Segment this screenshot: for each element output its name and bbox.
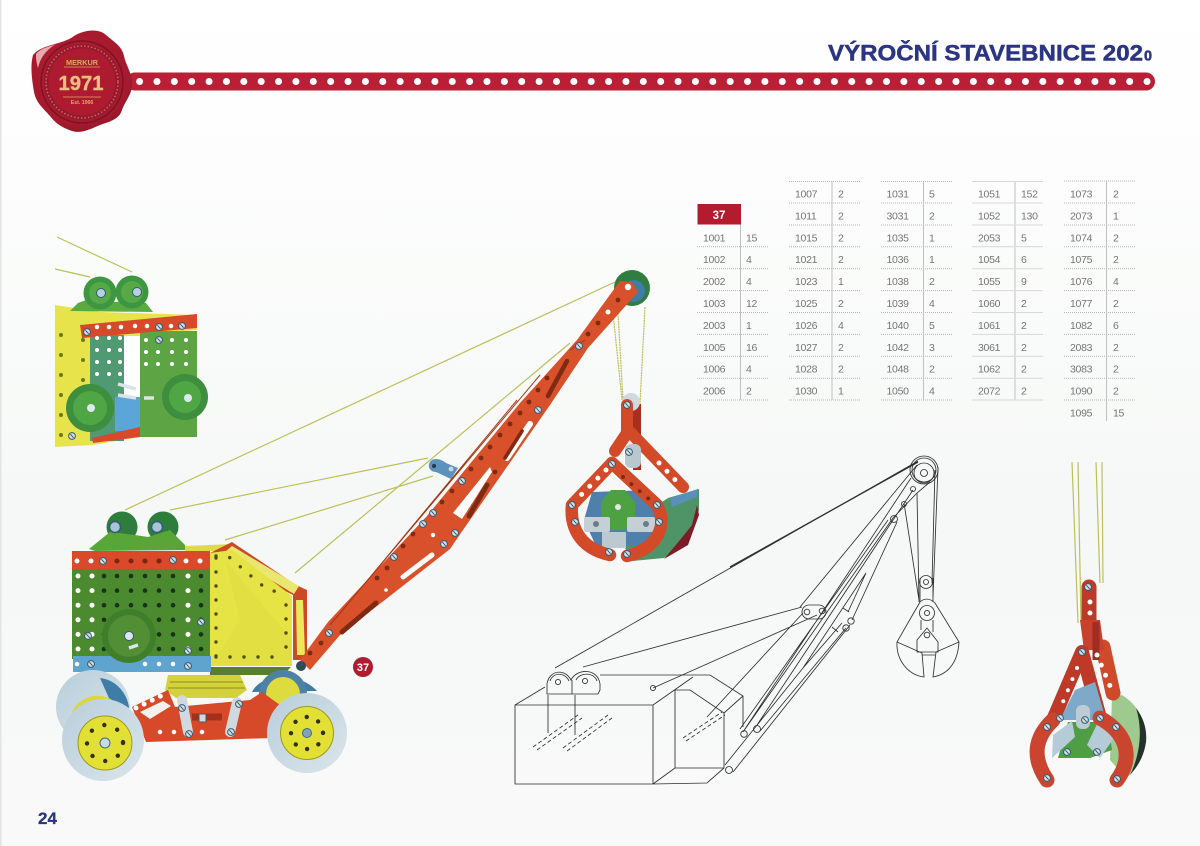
table column 5: 4: [1113, 276, 1119, 288]
diagram pulleys: [547, 671, 656, 694]
wax seal 1971: MERKUR: [66, 58, 99, 67]
table column 5: 2: [1113, 342, 1119, 354]
table column 4: 2: [1021, 364, 1027, 376]
table column 2: 1: [838, 386, 844, 398]
table column 3: 1039: [886, 298, 909, 310]
closed grab strings: [1072, 462, 1103, 623]
table column 1 with red header 37: [697, 204, 769, 400]
grab bucket inner plates: [584, 490, 655, 548]
wax seal 1971: [31, 31, 132, 132]
table column 1 with red header 37: 12: [746, 298, 758, 310]
table column 3: 5: [929, 188, 935, 200]
table column 2: 1028: [795, 364, 818, 376]
cabin front: green panel with strips: [72, 551, 211, 672]
page number: 24: [38, 809, 57, 828]
table column 1 with red header 37: 16: [746, 342, 758, 354]
table column 1 with red header 37: 4: [746, 364, 752, 376]
chassis: [132, 690, 280, 742]
table column 2: 1011: [795, 210, 817, 222]
table column 3: 4: [929, 298, 935, 310]
grab bucket arms: [568, 393, 683, 558]
table column 5: 6: [1113, 320, 1119, 332]
table column 2: 2: [838, 188, 844, 200]
table column 5: 1075: [1070, 254, 1093, 266]
table column 4: 2: [1021, 298, 1027, 310]
table column 2: 1021: [795, 254, 818, 266]
table column 1 with red header 37: 4: [746, 276, 752, 288]
table column 3: 2: [929, 276, 935, 288]
table column 1 with red header 37: 2006: [703, 386, 726, 398]
table column 4: 152: [1021, 188, 1038, 200]
table column 5: 1077: [1070, 298, 1093, 310]
table column 3: 2: [929, 210, 935, 222]
table column 1 with red header 37: 1006: [703, 364, 726, 376]
table column 2: 1025: [795, 298, 818, 310]
diagram cables: [555, 461, 938, 717]
table column 1 with red header 37: 15: [746, 232, 758, 244]
table column 3: 1: [929, 232, 935, 244]
table column 4: 1051: [978, 188, 1001, 200]
table column 5: 1076: [1070, 276, 1093, 288]
table column 1 with red header 37: 2002: [703, 276, 726, 288]
table column 4: 5: [1021, 232, 1027, 244]
table column 3: 1040: [886, 320, 909, 332]
table column 3: 3: [929, 342, 935, 354]
boom top pulley: [614, 270, 650, 306]
table column 3: 1038: [886, 276, 909, 288]
table column 2: 1026: [795, 320, 818, 332]
table column 2: 2: [838, 232, 844, 244]
table column 1 with red header 37: 1001: [703, 232, 726, 244]
boom mount plate: [429, 459, 458, 479]
illustration: boom: [296, 270, 650, 671]
table column 5: 2083: [1070, 342, 1093, 354]
table column 4: [972, 182, 1043, 400]
title: 0: [1144, 49, 1152, 65]
table column 3: 3031: [886, 210, 909, 222]
table column 3: 2: [929, 364, 935, 376]
badge: model number 37: [353, 657, 373, 677]
illustration: rear detail of crane cabin: [55, 237, 208, 447]
table column 2: 2: [838, 298, 844, 310]
table column 5: 1095: [1070, 408, 1093, 420]
table column 5: 2: [1113, 298, 1119, 310]
table column 4: 3061: [978, 342, 1001, 354]
table column 4: 2053: [978, 232, 1001, 244]
illustration: crane strings: [125, 282, 645, 573]
front wheels: [62, 693, 347, 781]
table column 2: 1015: [795, 232, 818, 244]
diagram grab bucket: [897, 576, 959, 677]
table column 4: 1054: [978, 254, 1001, 266]
illustration: crane main body: [56, 512, 347, 781]
table column 4: 1060: [978, 298, 1001, 310]
table column 2: 1023: [795, 276, 818, 288]
table column 2: 1027: [795, 342, 818, 354]
table column 4: 1061: [978, 320, 1001, 332]
table column 4: 2: [1021, 386, 1027, 398]
table column 3: 1050: [886, 386, 909, 398]
grab bucket shell: [584, 489, 699, 561]
table column 3: [881, 182, 952, 400]
table column 4: 6: [1021, 254, 1027, 266]
table column 4: 1055: [978, 276, 1001, 288]
table column 5: 1073: [1070, 188, 1093, 200]
table column 4: 130: [1021, 210, 1038, 222]
diagram cabin box: [515, 675, 743, 784]
illustration: grab bucket closed: [1037, 462, 1146, 783]
table column 2: 2: [838, 210, 844, 222]
table column 5: 1090: [1070, 386, 1093, 398]
table column 5: 2: [1113, 364, 1119, 376]
table column 5: 2: [1113, 254, 1119, 266]
table column 1 with red header 37: 1002: [703, 254, 726, 266]
table column 2: 2: [838, 364, 844, 376]
table column 2: [789, 182, 860, 400]
parts table: [697, 181, 1135, 421]
table column 1 with red header 37: 2: [746, 386, 752, 398]
table column 1 with red header 37: 37: [713, 210, 725, 222]
table column 3: 5: [929, 320, 935, 332]
boom lattice: [296, 281, 638, 671]
table column 4: 1052: [978, 210, 1001, 222]
table column 2: 1007: [795, 188, 818, 200]
rear wheels: [56, 670, 317, 744]
table column 2: 2: [838, 342, 844, 354]
table column 5: 1082: [1070, 320, 1093, 332]
title: VÝROČNÍ STAVEBNICE 202: [828, 41, 1143, 66]
wax seal 1971: 1971: [58, 73, 104, 95]
closed grab drum and arms: [1037, 583, 1146, 783]
table column 3: 1031: [886, 188, 909, 200]
cabin side: yellow panel: [210, 542, 307, 675]
line drawing: technical crane diagram: [515, 456, 959, 784]
table column 4: 2: [1021, 342, 1027, 354]
table column 2: 4: [838, 320, 844, 332]
table column 1 with red header 37: 1003: [703, 298, 726, 310]
table column 3: 1: [929, 254, 935, 266]
table column 4: 1062: [978, 364, 1001, 376]
table column 5: 15: [1113, 408, 1125, 420]
wax seal 1971: Est. 1966: [71, 100, 93, 106]
turntable: [165, 675, 247, 698]
table column 5: [1064, 181, 1135, 421]
table column 5: 2: [1113, 386, 1119, 398]
table column 2: 1030: [795, 386, 818, 398]
table column 5: 1074: [1070, 232, 1093, 244]
diagram boom: [725, 456, 938, 774]
table column 4: 9: [1021, 276, 1027, 288]
illustration: grab bucket open: [568, 393, 699, 561]
table column 2: 2: [838, 254, 844, 266]
table column 1 with red header 37: 1005: [703, 342, 726, 354]
table column 3: 1048: [886, 364, 909, 376]
table column 5: 1: [1113, 210, 1119, 222]
crane pulleys: [89, 512, 232, 551]
table column 4: 2072: [978, 386, 1001, 398]
table column 3: 1036: [886, 254, 909, 266]
table column 1 with red header 37: 1: [746, 320, 752, 332]
table column 1 with red header 37: 4: [746, 254, 752, 266]
table column 5: 2: [1113, 188, 1119, 200]
table column 4: 2: [1021, 320, 1027, 332]
badge: model number 37: 37: [357, 662, 369, 674]
table column 5: 2073: [1070, 210, 1093, 222]
table column 3: 1042: [886, 342, 909, 354]
table column 3: 1035: [886, 232, 909, 244]
table column 3: 4: [929, 386, 935, 398]
table column 5: 2: [1113, 232, 1119, 244]
table column 2: 1: [838, 276, 844, 288]
table column 5: 3083: [1070, 364, 1093, 376]
ribbon: perforated red strip: [126, 72, 1155, 90]
table column 1 with red header 37: 2003: [703, 320, 726, 332]
